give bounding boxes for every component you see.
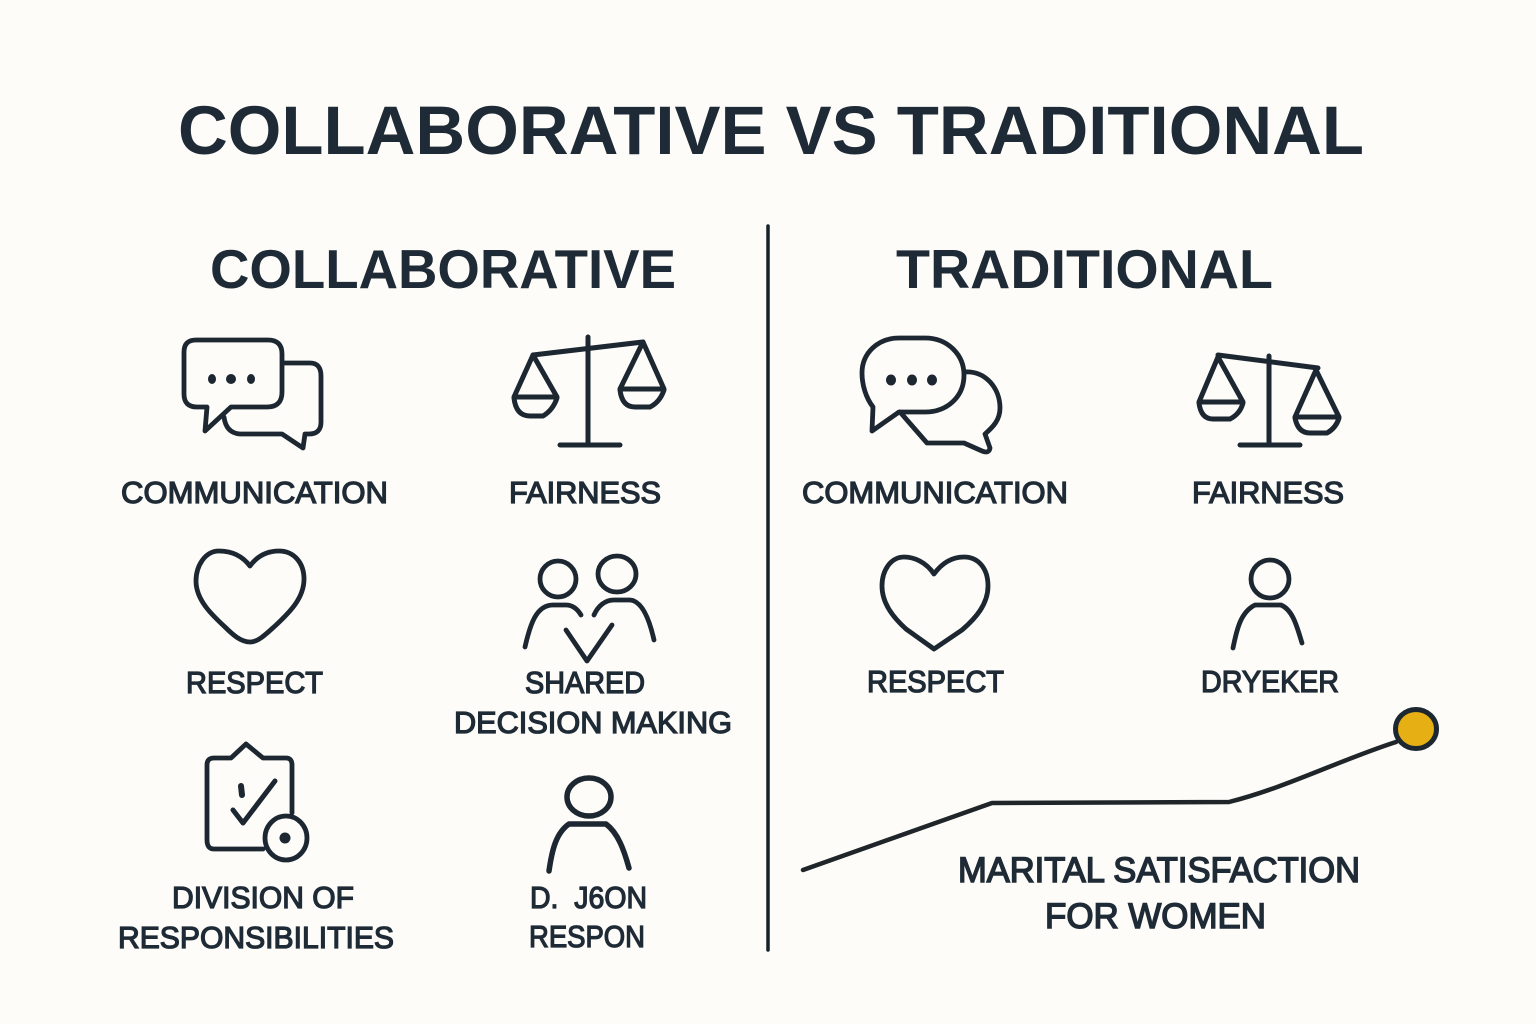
label: respect: RESPECT	[186, 665, 323, 700]
label: division of: DIVISION OF	[172, 880, 354, 915]
item: fairness	[1192, 355, 1344, 510]
trend line	[803, 742, 1396, 870]
item: respect	[867, 557, 1004, 699]
icon: rounded chat bubbles	[862, 338, 1000, 452]
label: for women: FOR WOMEN	[1045, 897, 1266, 936]
item: respect	[186, 551, 323, 700]
panel: traditional	[802, 238, 1436, 936]
end marker	[1396, 710, 1436, 748]
label: respect: RESPECT	[867, 664, 1004, 699]
item: shared decision making	[454, 556, 732, 740]
icon: balance scale	[514, 337, 664, 445]
item: garbled label person	[1201, 560, 1339, 699]
icon: chat bubbles	[184, 340, 321, 448]
label: d. j6on: D. J6ON	[530, 880, 647, 915]
label: communication: COMMUNICATION	[121, 475, 388, 510]
panel: collaborative	[118, 238, 732, 955]
item: garbled decision responsibility	[529, 778, 647, 954]
heading: collaborative: COLLABORATIVE	[210, 238, 676, 300]
icon: heart	[196, 551, 304, 642]
line chart: marital satisfaction for women	[803, 710, 1436, 936]
icon: person	[1233, 560, 1302, 648]
icon: person	[549, 778, 629, 871]
label: shared: SHARED	[525, 665, 645, 700]
heading: traditional: TRADITIONAL	[896, 238, 1273, 300]
label: fairness: FAIRNESS	[509, 475, 661, 510]
center divider	[766, 226, 770, 950]
label: fairness: FAIRNESS	[1192, 475, 1344, 510]
label: dryeker: DRYEKER	[1201, 664, 1339, 699]
label: responsibilities: RESPONSIBILITIES	[118, 920, 394, 955]
icon: balance scale	[1199, 355, 1339, 445]
item: fairness	[509, 337, 664, 510]
label: marital satisfaction: MARITAL SATISFACTION	[958, 851, 1360, 890]
title: COLLABORATIVE VS TRADITIONAL	[178, 92, 1364, 169]
item: communication	[802, 338, 1068, 510]
item: division of responsibilities	[118, 744, 394, 955]
icon: two people with check	[525, 556, 654, 661]
icon: clipboard with check and badge	[207, 744, 307, 860]
label: respon: RESPON	[529, 919, 645, 954]
item: communication	[121, 340, 388, 510]
label: decision making: DECISION MAKING	[454, 705, 732, 740]
label: communication: COMMUNICATION	[802, 475, 1068, 510]
icon: heart	[882, 557, 988, 649]
